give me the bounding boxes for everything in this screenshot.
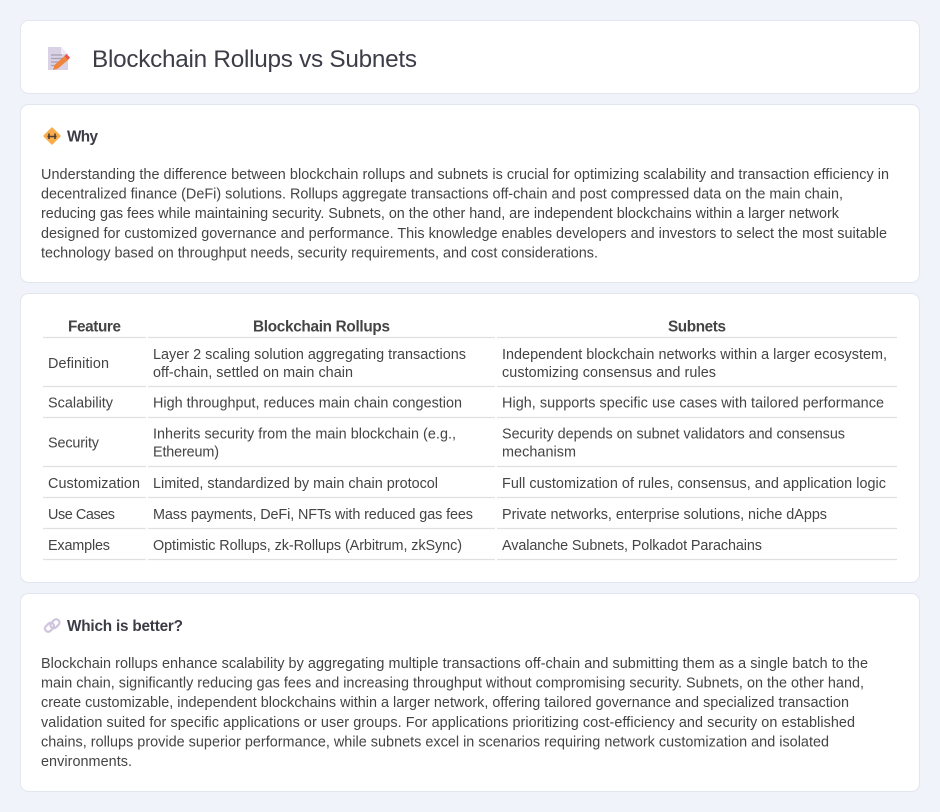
- table row lines: [43, 338, 897, 560]
- table row: definition: Definition: [48, 356, 109, 372]
- table row: customization: [48, 476, 886, 492]
- table header row: Feature: [68, 318, 121, 336]
- table row: use cases: [48, 507, 827, 523]
- text block: why body: designed for customized governance and performance. This knowledge enables developers and investors to select the most suitable: [41, 226, 887, 242]
- text block: why body: decentralized finance (DeFi) solutions. Rollups aggregate transactions off-chain and post compressed data on the main chain,: [41, 187, 843, 203]
- panel: comparison table: [20, 294, 920, 582]
- table row: examples: [48, 538, 762, 554]
- table row: examples: Optimistic Rollups, zk-Rollups (Arbitrum, zkSync): [153, 538, 462, 554]
- text block: why body: Understanding the difference between blockchain rollups and subnets is crucial for optimizing scalability and transaction efficiency in: [41, 167, 889, 183]
- table row: customization: Full customization of rules, consensus, and application logic: [502, 476, 886, 492]
- table row: security: Security: [48, 436, 100, 452]
- panel: which is better: [20, 594, 920, 792]
- table row: examples: Examples: [48, 538, 110, 554]
- table row: security: Security depends on subnet validators and consensus: [502, 426, 845, 442]
- text block: which is better body: validation suited for specific applications or user groups. For applications prioritizing cost-efficiency and security on established: [41, 715, 855, 731]
- table row: use cases: Use Cases: [48, 507, 115, 523]
- table row: scalability: [48, 396, 884, 412]
- text block: which is better body: main chain, significantly reducing gas fees and increasing throughput without compromising security. Subnets, on the other hand,: [41, 676, 864, 692]
- panel: why: [20, 104, 920, 282]
- heading: why: Why: [67, 128, 98, 146]
- text block: which is better body: Blockchain rollups enhance scalability by aggregating multiple transactions off-chain and submitting them as a single batch to the: [41, 656, 868, 672]
- table row: security: [48, 426, 845, 460]
- table row: scalability: High, supports specific use cases with tailored performance: [502, 396, 884, 412]
- heading: which is better: Which is better?: [67, 618, 183, 635]
- text block: why body: technology based on throughput needs, security requirements, and cost considerations.: [41, 245, 598, 261]
- text block: why body: reducing gas fees while maintaining security. Subnets, on the other hand, are independent blockchains within a larger network: [41, 206, 840, 222]
- text block: which is better body: create customizable, independent blockchains within a larger network, offering tailored governance and specialized transaction: [41, 695, 849, 711]
- icon: warning diamond: [44, 128, 60, 144]
- table row: customization: Customization: [48, 476, 140, 492]
- heading: title text: Blockchain Rollups vs Subnets: [92, 46, 417, 73]
- text block: which is better body: chains, rollups provide superior performance, while subnets excel in scenarios requiring network customization and isolated: [41, 734, 829, 750]
- table row: definition: off-chain, settled on main chain: [153, 365, 353, 381]
- panel: title: [20, 20, 920, 94]
- table row: security: mechanism: [502, 444, 576, 460]
- table row: security: Inherits security from the main blockchain (e.g.,: [153, 426, 456, 442]
- table row: definition: Layer 2 scaling solution aggregating transactions: [153, 347, 466, 363]
- table header row: Blockchain Rollups: [253, 318, 390, 336]
- table row: definition: customizing consensus and rules: [502, 365, 716, 381]
- table row: definition: [48, 347, 887, 381]
- icon: chain link: [44, 618, 61, 633]
- text block: which is better body: environments.: [41, 754, 132, 770]
- table row: scalability: High throughput, reduces main chain congestion: [153, 396, 462, 412]
- icon: document with pencil: [48, 47, 70, 70]
- text block: why body: [41, 167, 889, 261]
- table row: customization: Limited, standardized by main chain protocol: [153, 476, 438, 492]
- table header row: Subnets: [668, 318, 726, 336]
- table row: security: Ethereum): [153, 444, 219, 460]
- table row: use cases: Mass payments, DeFi, NFTs with reduced gas fees: [153, 507, 473, 523]
- table row: examples: Avalanche Subnets, Polkadot Parachains: [502, 538, 762, 554]
- table row: scalability: Scalability: [48, 396, 114, 412]
- table row: definition: Independent blockchain networks within a larger ecosystem,: [502, 347, 887, 363]
- table header row: [68, 318, 726, 336]
- text block: which is better body: [41, 656, 868, 770]
- table row: use cases: Private networks, enterprise solutions, niche dApps: [502, 507, 827, 523]
